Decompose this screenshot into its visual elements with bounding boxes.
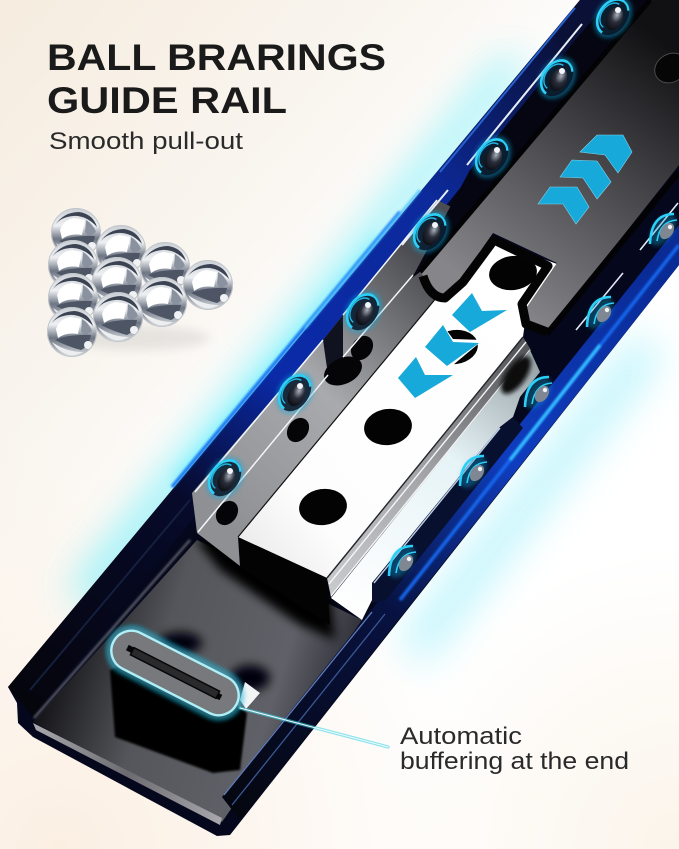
ball bearings in rings: [198, 0, 679, 582]
chevrons on white rail: [398, 293, 507, 398]
dark upper channel: [412, 0, 650, 278]
silver channel edges: [327, 337, 530, 596]
right silver channel lines: [327, 337, 531, 597]
bottom floor: [33, 540, 362, 822]
dark upper plate between balls: [323, 315, 343, 375]
rail edge line: [238, 297, 437, 537]
callout text: buffering at the end: [400, 748, 629, 775]
white halo around middle chevron: [420, 321, 483, 370]
upper silver lines: [402, 24, 582, 245]
right wall highlights: [224, 245, 679, 805]
rail holes: [297, 253, 539, 528]
front black face: [238, 537, 330, 625]
buffer block: [110, 650, 247, 773]
left wall: [8, 0, 612, 717]
buffer window: [240, 682, 260, 709]
steel balls cluster: [47, 208, 233, 357]
plate upper edge: [420, 0, 650, 272]
dark bearing holes: [211, 332, 378, 529]
right wall: [222, 225, 679, 820]
right dark strip: [372, 417, 523, 603]
chevrons on plate: [538, 135, 632, 224]
subtitle: Smooth pull-out: [49, 128, 243, 155]
callout text: Automatic: [400, 723, 522, 750]
right strip edge: [374, 428, 500, 583]
inner lip of left wall: [34, 540, 190, 718]
plate lower edge: [547, 172, 679, 334]
left silver channel: [192, 200, 462, 566]
plate mounting hole: [649, 47, 679, 89]
notch thickness: [423, 240, 548, 332]
floor shadow under inner rail: [196, 530, 335, 640]
silver plate edge lines: [195, 200, 437, 532]
end lip: [33, 723, 222, 825]
light floor strip: [331, 350, 540, 620]
title: BALL BRARINGS: [47, 37, 386, 78]
inner white rail: [238, 240, 560, 578]
cyan glow behind rail: [70, 60, 660, 665]
callout line: [240, 708, 388, 747]
highlighted buffer capsule: [100, 620, 250, 726]
shadows beside buffer: [158, 632, 270, 691]
right upper silver lines: [576, 203, 678, 330]
shadow at rail end: [495, 351, 537, 399]
title: [47, 37, 386, 121]
title: GUIDE RAIL: [47, 80, 287, 121]
top carriage plate: [420, 0, 679, 332]
callout text: [400, 723, 629, 775]
left wall highlights: [30, 8, 575, 690]
